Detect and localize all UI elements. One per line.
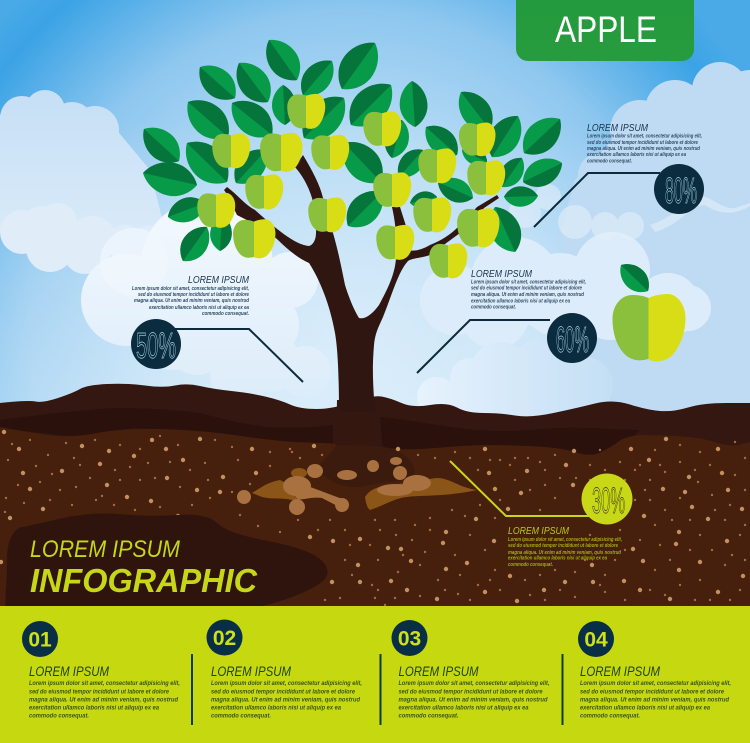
callout: 30%: commodo consequat. [508, 562, 553, 568]
sky background [0, 0, 750, 420]
callout: 30%: magna aliqua. Ut enim ad minim veniam, quis nostrud [508, 550, 622, 556]
tree roots and rocks [237, 457, 477, 515]
callout: 50%: sed do eiusmod tempor incididunt ut labore et dolore [138, 292, 249, 298]
callout: 60% [417, 268, 597, 373]
ground layers [0, 384, 750, 610]
footer item 03 [380, 620, 550, 725]
footer item 03: 03 [398, 628, 421, 650]
footer item 03: commodo consequat. [398, 712, 459, 720]
callout: 30%: exercitation ullamco laboris nisi ut aliquip ex ea [508, 556, 607, 562]
callout: 50%: commodo consequat. [202, 311, 249, 317]
footer item 02: sed do eiusmod tempor incididunt ut labore et dolore [211, 688, 355, 695]
callout: 50%: magna aliqua. Ut enim ad minim veniam, quis nostrud [134, 298, 250, 304]
footer item 01: commodo consequat. [29, 712, 89, 720]
footer item 02: 02 [213, 627, 236, 650]
callout: 80%: commodo consequat. [587, 158, 632, 164]
callout: 50%: LOREM IPSUM [188, 274, 249, 286]
footer item 04: magna aliqua. Ut enim ad minim veniam, quis nostrud [580, 696, 730, 704]
callout: 30%: sed do eiusmod tempor incididunt ut labore et dolore [508, 543, 618, 549]
callout: 60%: magna aliqua. Ut enim ad minim veniam, quis nostrud [471, 292, 585, 298]
callout: 30% [450, 461, 632, 568]
footer item 01: LOREM IPSUM [29, 663, 109, 679]
callout: 50%: 50% [136, 325, 176, 366]
callout: 80%: 80% [665, 170, 697, 211]
footer item 04: 04 [584, 628, 608, 652]
footer band [0, 606, 750, 743]
root shadow in soil [318, 445, 414, 487]
footer item 01: Lorem ipsum dolor sit amet, consectetur adipisicing elit, [29, 680, 180, 687]
footer item 01: exercitation ullamco laboris nisi ut aliquip ex ea [29, 704, 159, 712]
soil speckles [1, 432, 745, 605]
callout: 30%: LOREM IPSUM [508, 525, 569, 537]
header tag: APPLE: APPLE [555, 9, 657, 50]
tree trunk and branches [224, 155, 499, 412]
footer item 01: magna aliqua. Ut enim ad minim veniam, quis nostrud [29, 696, 179, 704]
icon: large apple [612, 257, 686, 361]
callout: 60%: exercitation ullamco laboris nisi ut aliquip ex ea [471, 298, 570, 304]
footer item 02: Lorem ipsum dolor sit amet, consectetur adipisicing elit, [211, 680, 362, 687]
footer item 04: LOREM IPSUM [580, 663, 660, 679]
title backdrop [5, 514, 328, 607]
footer item 04 [562, 621, 731, 725]
callout: 30%: 30% [592, 480, 625, 521]
callout: 60%: LOREM IPSUM [471, 268, 532, 280]
callout: 60%: sed do eiusmod tempor incididunt ut labore et dolore [471, 286, 582, 292]
callout: 50%: Lorem ipsum dolor sit amet, consectetur adipisicing elit, [132, 286, 249, 292]
footer item 04: sed do eiusmod tempor incididunt ut labore et dolore [580, 688, 724, 695]
callout: 60%: 60% [556, 319, 589, 360]
tree leaves [134, 32, 570, 268]
footer item 01: 01 [28, 628, 52, 652]
footer item 04: exercitation ullamco laboris nisi ut aliquip ex ea [580, 704, 710, 712]
callout: 80% [534, 122, 704, 227]
footer item 03: exercitation ullamco laboris nisi ut aliquip ex ea [398, 704, 529, 712]
callout: 80%: sed do eiusmod tempor incididunt ut labore et dolore [587, 140, 698, 146]
callout: 80%: LOREM IPSUM [587, 122, 648, 134]
footer item 02: magna aliqua. Ut enim ad minim veniam, quis nostrud [211, 696, 361, 704]
title: LOREM IPSUM [30, 536, 180, 563]
callout: 80%: Lorem ipsum dolor sit amet, consectetur adipisicing elit, [587, 134, 702, 140]
footer item 01 [22, 621, 180, 720]
footer item 02: commodo consequat. [211, 712, 271, 720]
footer item 04: commodo consequat. [580, 712, 640, 720]
callout: 60%: Lorem ipsum dolor sit amet, consectetur adipisicing elit, [471, 280, 586, 286]
footer item 03: Lorem ipsum dolor sit amet, consectetur adipisicing elit, [398, 680, 550, 687]
header tag: APPLE [516, 0, 694, 61]
title: INFOGRAPHIC [30, 562, 258, 599]
tree apples [197, 94, 505, 278]
callout: 60%: commodo consequat. [471, 304, 516, 310]
callout: 50% [131, 274, 303, 382]
footer item 02: exercitation ullamco laboris nisi ut aliquip ex ea [211, 704, 341, 712]
footer item 02: LOREM IPSUM [211, 663, 291, 679]
callout: 80%: magna aliqua. Ut enim ad minim veniam, quis nostrud [587, 146, 701, 152]
footer item 01: sed do eiusmod tempor incididunt ut labore et dolore [29, 688, 169, 695]
callout: 80%: exercitation ullamco laboris nisi ut aliquip ex ea [587, 152, 686, 158]
footer item 03: magna aliqua. Ut enim ad minim veniam, quis nostrud [398, 696, 548, 704]
title [30, 536, 258, 599]
trunk continuing below ground [336, 400, 378, 447]
footer item 02 [191, 620, 362, 725]
callout: 30%: Lorem ipsum dolor sit amet, consectetur adipisicing elit, [508, 537, 622, 543]
footer item 03: LOREM IPSUM [398, 663, 479, 679]
clouds [0, 62, 750, 420]
callout: 50%: exercitation ullamco laboris nisi ut aliquip ex ea [149, 305, 249, 311]
footer item 03: sed do eiusmod tempor incididunt ut labore et dolore [398, 688, 543, 695]
